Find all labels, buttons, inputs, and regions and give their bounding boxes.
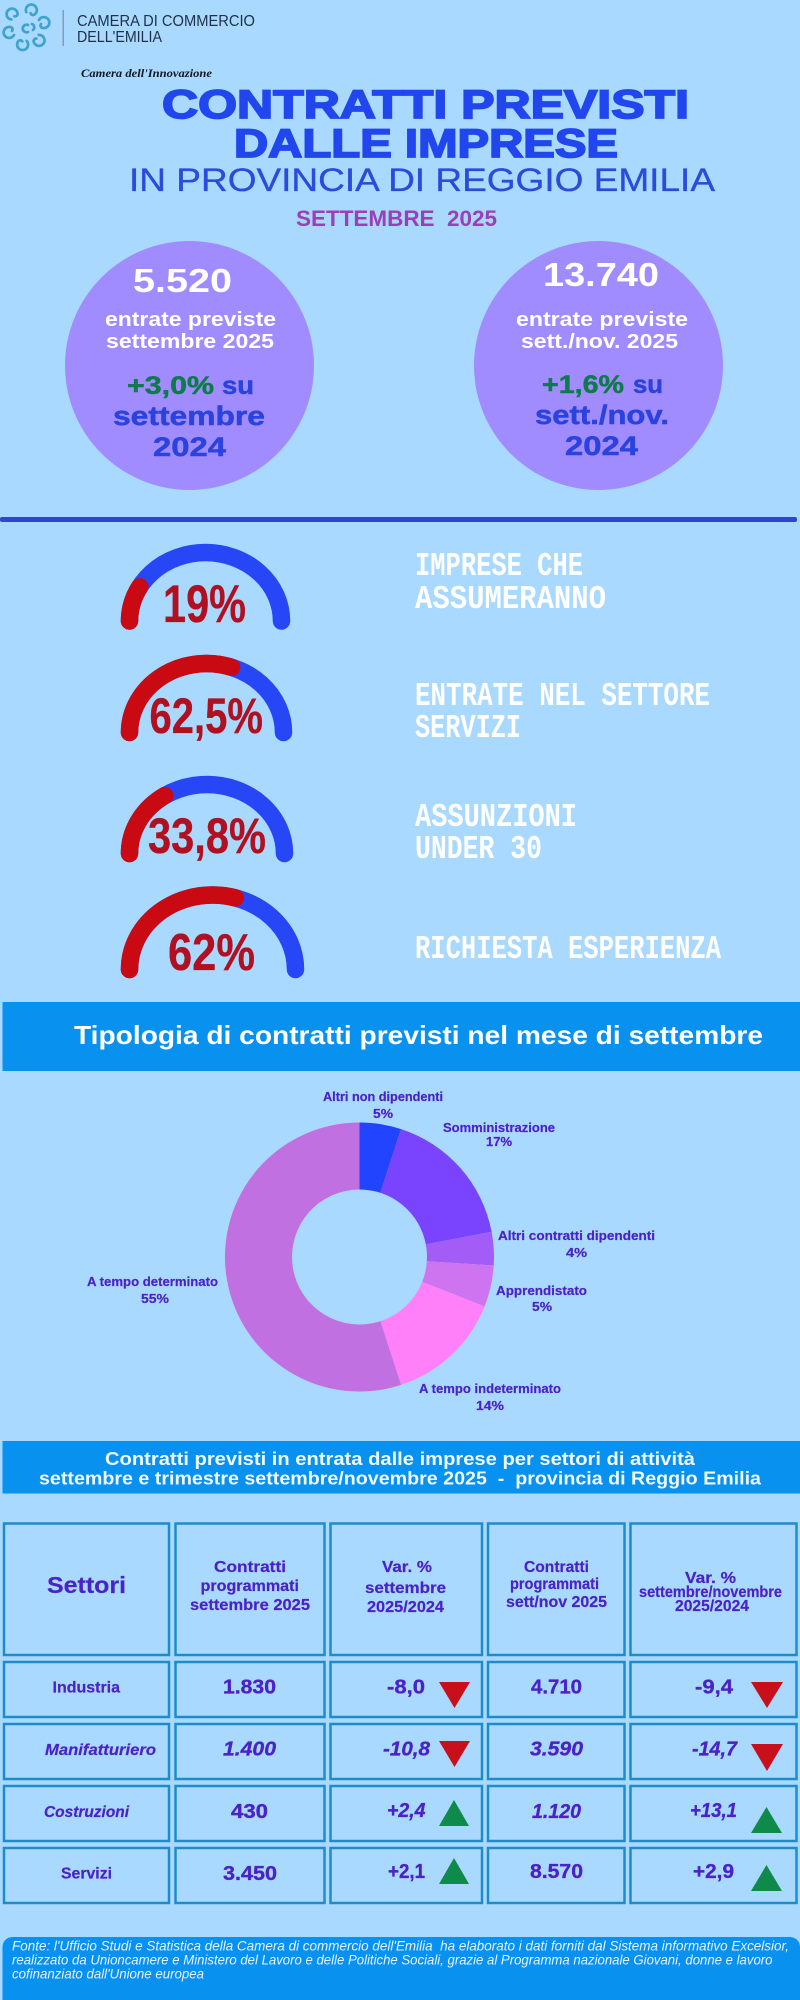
row: industria: Industria	[52, 1680, 120, 1696]
slice: altri contratti dipendenti	[426, 1232, 494, 1265]
gauge: imprese che assumeranno: 19%	[163, 575, 246, 634]
gauge label: imprese	[415, 548, 606, 618]
banner: contract types heading	[2, 1002, 800, 1071]
gauge label: esperienza: RICHIESTA ESPERIENZA	[415, 931, 721, 968]
title	[129, 83, 716, 231]
donut labels: 4%	[566, 1245, 587, 1260]
banner: sector table heading	[2, 1441, 800, 1494]
header: var settembre	[365, 1559, 446, 1616]
donut labels: 5%	[532, 1299, 552, 1314]
donut labels: A tempo indeterminato	[419, 1381, 561, 1396]
donut labels: A tempo determinato	[87, 1274, 218, 1289]
row: costruzioni: +13,1	[690, 1800, 737, 1822]
date: SETTEMBRE 2025	[296, 206, 497, 231]
donut labels: 55%	[141, 1291, 169, 1306]
gauge label: under 30: ASSUNZIONI	[415, 799, 577, 836]
logo wordmark	[77, 13, 255, 46]
donut labels: 17%	[486, 1134, 512, 1149]
header: var trimestre: settembre/novembre	[639, 1584, 782, 1601]
header: contratti trimestre: Contratti	[524, 1559, 589, 1576]
donut labels: Altri contratti dipendenti	[498, 1228, 655, 1243]
table: contracts by sector	[4, 1524, 796, 1903]
row: industria	[52, 1676, 783, 1708]
donut labels: Apprendistato	[496, 1283, 587, 1298]
gauge: imprese che assumeranno	[130, 553, 282, 634]
gauge: richiesta esperienza: 62%	[168, 924, 255, 982]
gauge: entrate settore servizi: 62,5%	[150, 688, 263, 744]
description	[105, 309, 276, 353]
gauge: richiesta esperienza	[130, 895, 296, 982]
header: var settembre: Var. %	[382, 1559, 432, 1576]
header: var settembre: 2025/2024	[367, 1599, 444, 1616]
donut labels: 14%	[476, 1398, 504, 1413]
donut labels: 5%	[373, 1106, 393, 1121]
description	[516, 309, 688, 353]
gauge label: servizi: ENTRATE NEL SETTORE	[415, 678, 710, 715]
variation: su	[633, 371, 663, 399]
header: var settembre: settembre	[365, 1580, 446, 1597]
variation: sett./nov.	[535, 400, 669, 430]
logo wordmark: CAMERA DI COMMERCIO	[77, 13, 255, 30]
slice: altri non dipendenti	[360, 1122, 401, 1193]
icon: logo swirls	[4, 2, 49, 52]
header: var trimestre	[639, 1570, 782, 1615]
row: manifatturiero: 3.590	[530, 1738, 583, 1760]
variation: +1,6%	[542, 371, 624, 399]
row: servizi: +2,1	[388, 1861, 425, 1883]
footer: source note: Fonte: l'Ufficio Studi e Statistica della Camera di commercio dell'Emilia ha elaborato i dati forniti dal Sistema informativo Excelsior,	[12, 1938, 789, 1954]
variation: su	[222, 372, 254, 400]
header: contratti trimestre: sett/nov 2025	[506, 1594, 607, 1611]
slice: somministrazione	[380, 1129, 492, 1244]
row: manifatturiero: Manifatturiero	[45, 1742, 156, 1759]
donut labels: Altri non dipendenti	[323, 1089, 443, 1104]
row: servizi: 8.570	[530, 1861, 583, 1883]
header: contratti trimestre: programmati	[510, 1576, 599, 1593]
panel: quarterly entries circle	[474, 241, 723, 490]
description: sett./nov. 2025	[521, 331, 678, 353]
donut labels	[87, 1089, 655, 1413]
big number: 13.740	[543, 256, 659, 293]
row: servizi: Servizi	[61, 1866, 112, 1882]
logo wordmark: DELL'EMILIA	[77, 29, 163, 46]
header: contratti settembre: settembre 2025	[190, 1597, 310, 1614]
gauge: assunzioni under 30	[129, 785, 284, 864]
donut chart: contract types	[225, 1122, 494, 1392]
row: industria: 4.710	[531, 1676, 582, 1698]
gauge label: under 30	[415, 799, 577, 868]
big number: 5.520	[133, 262, 232, 299]
footer: source note: realizzato da Unioncamere e Ministero del Lavoro e delle Politiche Sociali, grazie al Programma nazionale Giovani, donne e lavoro	[12, 1951, 773, 1967]
section divider	[0, 517, 797, 522]
footer: source note: cofinanziato dall'Unione europea	[12, 1966, 204, 1982]
row: servizi	[61, 1858, 782, 1891]
circle background	[474, 241, 723, 490]
gauge: assunzioni under 30: 33,8%	[148, 808, 266, 864]
row: manifatturiero: -10,8	[383, 1738, 431, 1760]
slice: apprendistato	[422, 1261, 494, 1306]
footer: source note	[2, 1937, 800, 2000]
row: servizi: +2,9	[693, 1861, 734, 1883]
row: costruzioni	[44, 1800, 782, 1833]
gauge label: imprese: IMPRESE CHE	[415, 548, 583, 585]
row: costruzioni: Costruzioni	[44, 1804, 130, 1821]
panel: monthly entries circle	[65, 241, 314, 490]
variation: 2024	[565, 431, 638, 461]
title line 1: CONTRATTI PREVISTI	[162, 83, 689, 127]
row: costruzioni: 430	[231, 1801, 268, 1823]
description: entrate previste	[516, 309, 688, 331]
header logo: Camera di Commercio dell'Emilia	[4, 2, 255, 52]
row: servizi: 3.450	[223, 1863, 277, 1885]
banner: sector table heading: settembre e trimestre settembre/novembre 2025 - provincia di Reggio Emilia	[39, 1468, 762, 1488]
title line 2: DALLE IMPRESE	[234, 122, 618, 166]
banner: contract types heading: Tipologia di contratti previsti nel mese di settembre	[74, 1020, 763, 1050]
variation: settembre	[113, 401, 265, 431]
header: var trimestre: 2025/2024	[675, 1598, 749, 1615]
gauge: entrate settore servizi	[130, 664, 284, 744]
variation: +3,0%	[127, 372, 214, 400]
header: settori: Settori	[47, 1572, 126, 1598]
description: settembre 2025	[106, 331, 274, 353]
donut labels: Somministrazione	[443, 1120, 555, 1135]
row: manifatturiero: -14,7	[692, 1738, 738, 1760]
banner: sector table heading: Contratti previsti in entrata dalle imprese per settori di attività	[105, 1449, 696, 1469]
header: contratti settembre	[190, 1559, 310, 1614]
variation	[113, 372, 265, 462]
row: industria: 1.830	[223, 1676, 276, 1698]
gauge label: servizi	[415, 678, 710, 747]
row: industria: -9,4	[695, 1676, 734, 1698]
variation	[535, 371, 669, 461]
row: costruzioni: +2,4	[387, 1800, 426, 1822]
header: contratti trimestre	[506, 1559, 607, 1611]
slice: a tempo indeterminato	[380, 1282, 485, 1385]
header: contratti settembre: programmati	[200, 1578, 299, 1595]
gauge label: imprese: ASSUMERANNO	[415, 581, 606, 618]
tagline: Camera dell'Innovazione	[81, 68, 212, 80]
header: var trimestre: Var. %	[685, 1570, 736, 1587]
table grid	[4, 1524, 796, 1903]
row: manifatturiero: 1.400	[223, 1738, 276, 1760]
gauge label: under 30: UNDER 30	[415, 831, 542, 868]
variation: 2024	[153, 432, 226, 462]
row: industria: -8,0	[387, 1676, 425, 1698]
header: contratti settembre: Contratti	[214, 1559, 286, 1576]
slice: a tempo determinato	[225, 1122, 401, 1392]
gauge label: servizi: SERVIZI	[415, 710, 521, 747]
logo divider	[62, 10, 64, 46]
description: entrate previste	[105, 309, 276, 331]
row: costruzioni: 1.120	[532, 1801, 581, 1823]
circle background	[65, 241, 314, 490]
subtitle: IN PROVINCIA DI REGGIO EMILIA	[129, 162, 716, 198]
row: manifatturiero	[45, 1738, 783, 1771]
